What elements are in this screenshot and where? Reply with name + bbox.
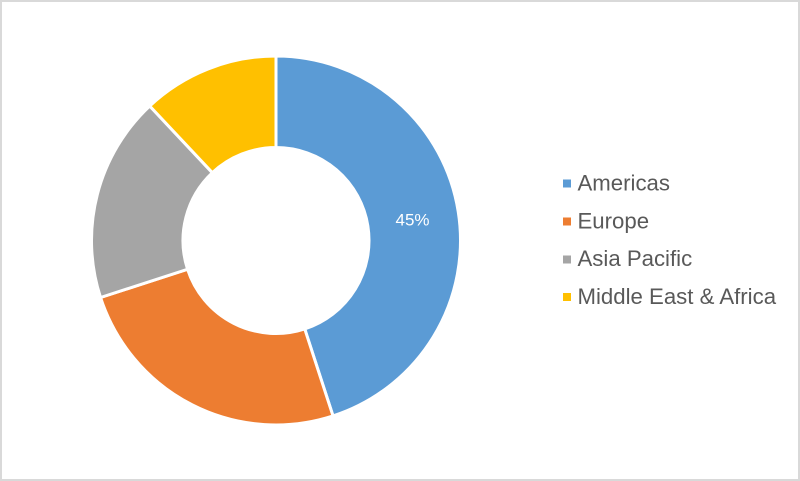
donut chart [91, 56, 460, 425]
legend item: Europe: Europe [578, 208, 649, 233]
legend item: Middle East & Africa: Middle East & Africa [578, 284, 777, 309]
data label: 45%: 45% [395, 210, 430, 230]
segment: Europe 25% [101, 269, 333, 425]
legend item: Asia Pacific: Asia Pacific [578, 246, 692, 271]
legend item: Americas: Americas [578, 171, 670, 196]
segment: Americas 45% [276, 56, 460, 416]
segment: Asia Pacific 18% [91, 106, 212, 298]
segment: Middle East & Africa 12% [150, 56, 276, 173]
legend [563, 171, 777, 309]
